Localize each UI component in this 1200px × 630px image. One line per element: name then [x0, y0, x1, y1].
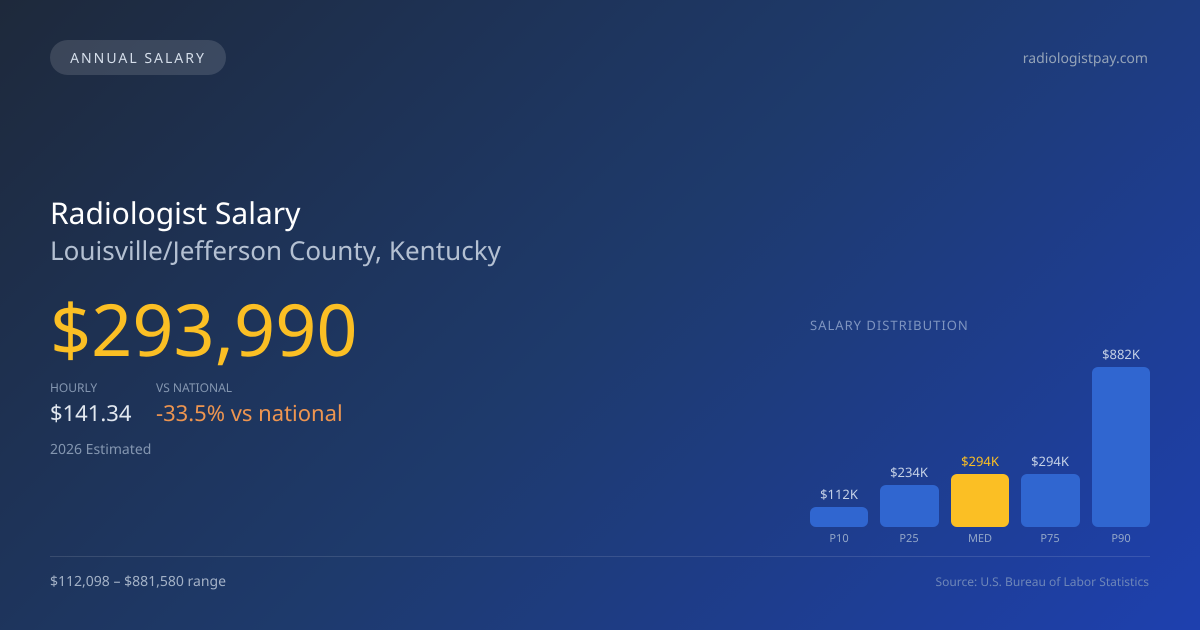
subtitle: location: Louisville/Jefferson County, Kentucky: [50, 232, 501, 268]
value P75: $294K: [1031, 452, 1069, 470]
label P25: P25: [899, 531, 919, 546]
label P90: P90: [1111, 531, 1131, 546]
hourly stat: [50, 379, 132, 428]
badge: annual salary: ANNUAL SALARY: [70, 49, 206, 68]
salary range: $112,098 – $881,580 range: [50, 572, 226, 591]
site domain: radiologistpay.com: [1023, 49, 1148, 68]
hourly value: $141.34: [50, 398, 131, 428]
bar P90: [1092, 367, 1150, 527]
main salary figure: $293,990: [50, 280, 358, 378]
label P75: P75: [1040, 531, 1060, 546]
label P10: P10: [829, 531, 849, 546]
badge: annual salary: [50, 40, 226, 75]
label median: MED: [968, 531, 992, 546]
vs national stat: [156, 379, 343, 428]
value P90: $882K: [1102, 345, 1140, 363]
value median: $294K: [961, 452, 999, 470]
year note: 2026 Estimated: [50, 440, 151, 459]
hourly label: HOURLY: [50, 379, 97, 396]
value P25: $234K: [890, 463, 928, 481]
bar P75: [1021, 474, 1080, 527]
title: Radiologist Salary: [50, 192, 300, 233]
bar P25: [880, 485, 939, 527]
source note: Source: U.S. Bureau of Labor Statistics: [936, 573, 1149, 590]
chart heading: SALARY DISTRIBUTION: [810, 316, 969, 334]
vs national label: VS NATIONAL: [156, 379, 232, 396]
value P10: $112K: [820, 485, 858, 503]
bar median: [951, 474, 1009, 527]
bar P10: [810, 507, 868, 527]
vs national value: -33.5% vs national: [156, 398, 343, 428]
